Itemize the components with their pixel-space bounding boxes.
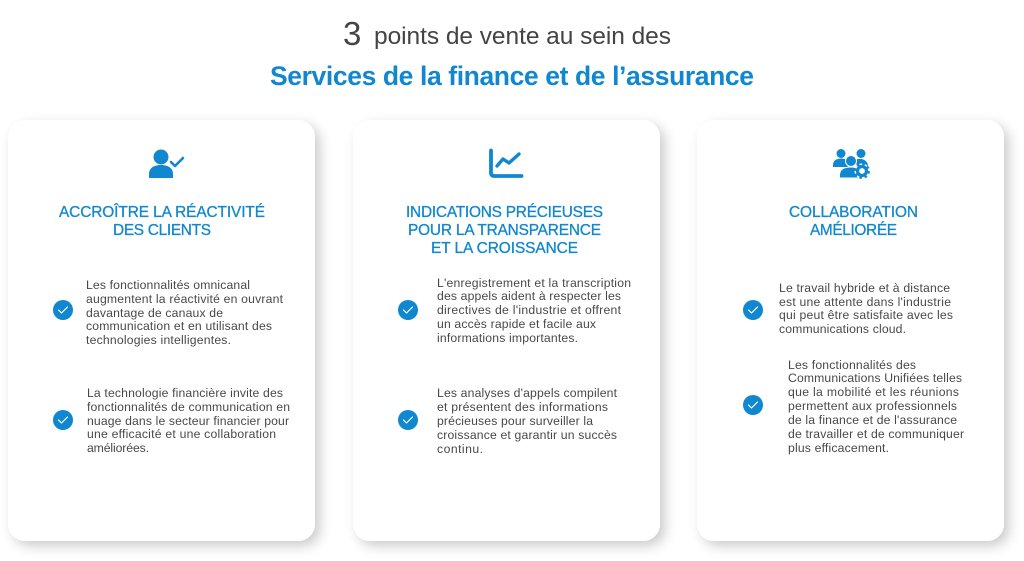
title bbox=[270, 15, 754, 91]
text block: augmentent la réactivité en ouvrant bbox=[86, 292, 284, 306]
panel heading: INDICATIONS PRÉCIEUSES bbox=[406, 204, 603, 221]
panel heading: COLLABORATION bbox=[789, 204, 918, 221]
text block: Le travail hybride et à distance bbox=[779, 281, 950, 295]
icon: check bullet bbox=[53, 300, 73, 320]
icon: check bullet bbox=[743, 395, 763, 415]
icon: check bullet bbox=[398, 300, 418, 320]
text block: améliorées. bbox=[87, 441, 149, 455]
text block: est une attente dans l'industrie bbox=[779, 295, 951, 309]
text block bbox=[86, 278, 284, 347]
text block: La technologie financière invite des bbox=[87, 386, 283, 400]
text block: un accès rapide et facile aux bbox=[437, 317, 596, 331]
text block: directives de l'industrie et offrent bbox=[437, 303, 622, 317]
panel heading bbox=[59, 204, 265, 239]
icon: line chart bbox=[491, 150, 522, 176]
text block: continu. bbox=[437, 442, 483, 456]
icon: person with check bbox=[149, 150, 183, 178]
text block: Les fonctionnalités des bbox=[788, 358, 916, 372]
title line 1 bbox=[343, 15, 671, 52]
icon: check bullet bbox=[398, 410, 418, 430]
text block: que la mobilité et les réunions bbox=[788, 385, 959, 399]
text block: Les fonctionnalités omnicanal bbox=[86, 278, 250, 292]
text block: qui peut être satisfaite avec les bbox=[779, 308, 953, 322]
text block: communications cloud. bbox=[779, 322, 906, 336]
text block: davantage de canaux de bbox=[86, 306, 223, 320]
text block bbox=[437, 386, 618, 456]
text block: précieuses pour surveiller la bbox=[437, 414, 593, 428]
title line 1: 3 bbox=[343, 15, 361, 52]
panel heading: AMÉLIORÉE bbox=[810, 222, 897, 239]
icon: check bullet bbox=[53, 410, 73, 430]
title line 2: Services de la finance et de l’assurance bbox=[270, 61, 754, 91]
panel heading: ET LA CROISSANCE bbox=[431, 240, 578, 257]
text block bbox=[788, 358, 964, 455]
text block: fonctionnalités de communication en bbox=[87, 400, 290, 414]
text block bbox=[87, 386, 290, 455]
panel heading bbox=[406, 204, 603, 257]
text block: de la finance et de l'assurance bbox=[788, 413, 957, 427]
icon: team with gear bbox=[833, 149, 870, 178]
text block: une efficacité et une collaboration bbox=[87, 427, 276, 441]
text block: technologies intelligentes. bbox=[86, 333, 231, 347]
text block: des appels aident à respecter les bbox=[437, 289, 621, 303]
title line 1: points de vente au sein des bbox=[374, 23, 671, 50]
panel heading bbox=[789, 204, 918, 239]
panel heading: DES CLIENTS bbox=[113, 222, 211, 239]
text block: croissance et garantir un succès bbox=[437, 428, 617, 442]
panel: collaboration améliorée bbox=[697, 120, 1004, 541]
text block: et présentent des informations bbox=[437, 400, 608, 414]
text block bbox=[779, 281, 953, 336]
text block: Les analyses d'appels compilent bbox=[437, 386, 618, 400]
text block: permettent aux professionnels bbox=[788, 399, 957, 413]
text block: communication et en utilisant des bbox=[86, 319, 272, 333]
panel: réactivité des clients bbox=[8, 120, 315, 541]
panel heading: POUR LA TRANSPARENCE bbox=[408, 222, 601, 239]
text block: L'enregistrement et la transcription bbox=[437, 276, 631, 290]
text block: de travailler et de communiquer bbox=[788, 427, 964, 441]
text block: nuage dans le secteur financier pour bbox=[87, 414, 289, 428]
text block: Communications Unifiées telles bbox=[788, 371, 962, 385]
panel: indications précieuses bbox=[353, 120, 660, 541]
icon: check bullet bbox=[743, 300, 763, 320]
text block: informations importantes. bbox=[437, 331, 578, 345]
text block bbox=[437, 276, 631, 345]
text block: plus efficacement. bbox=[788, 441, 889, 455]
panel heading: ACCROÎTRE LA RÉACTIVITÉ bbox=[59, 204, 265, 221]
